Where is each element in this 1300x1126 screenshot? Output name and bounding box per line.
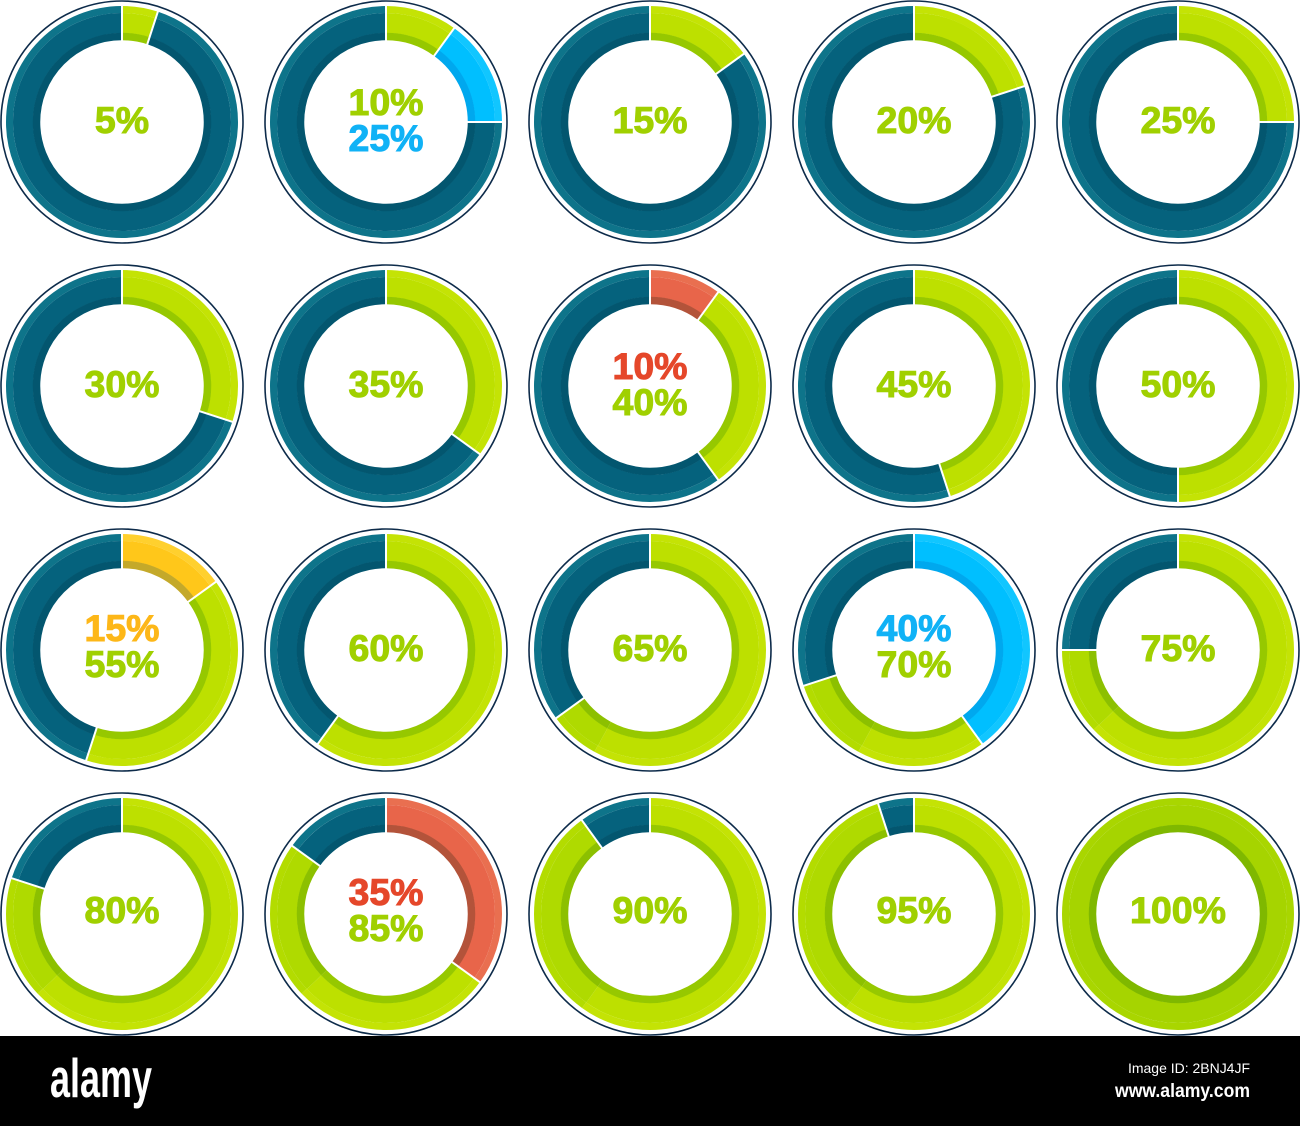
donut chart: 50%: 50% — [1140, 363, 1216, 405]
donut chart: 30% — [1, 265, 243, 507]
donut chart: 40% and 70% — [793, 529, 1035, 771]
donut chart: 100% — [1057, 793, 1299, 1035]
donut chart: 45% — [793, 265, 1035, 507]
donut chart: 20% — [793, 1, 1035, 243]
footer bar — [0, 1036, 1300, 1126]
donut chart: 65%: 65% — [612, 627, 688, 669]
donut chart: 25% — [1057, 1, 1299, 243]
donut chart: 60%: 60% — [348, 627, 424, 669]
donut chart: 5% — [1, 1, 243, 243]
image id: Image ID: 2BNJ4JF — [1128, 1060, 1250, 1076]
donut chart: 90%: 90% — [612, 889, 688, 931]
donut chart: 10% and 25%: 10% — [348, 81, 424, 123]
donut chart: 10% and 40%: 40% — [612, 381, 688, 423]
donut chart: 10% and 25%: 25% — [348, 117, 424, 159]
donut chart: 40% and 70%: 70% — [876, 643, 952, 685]
donut chart: 95% — [793, 793, 1035, 1035]
donut chart: 30%: 30% — [84, 363, 160, 405]
donut chart: 10% and 25% — [265, 1, 507, 243]
donut chart: 35% and 85%: 35% — [348, 871, 424, 913]
donut chart: 20%: 20% — [876, 99, 952, 141]
donut chart: 80% — [1, 793, 243, 1035]
donut chart: 75% — [1057, 529, 1299, 771]
website: www.alamy.com — [1114, 1081, 1250, 1102]
donut chart: 25%: 25% — [1140, 99, 1216, 141]
donut chart: 35%: 35% — [348, 363, 424, 405]
donut chart: 15% and 55%: 15% — [84, 607, 160, 649]
donut chart: 35% and 85%: 85% — [348, 907, 424, 949]
donut chart: 50% — [1057, 265, 1299, 507]
donut chart: 5%: 5% — [95, 99, 149, 141]
donut chart: 100%: 100% — [1130, 889, 1226, 931]
donut chart: 35% — [265, 265, 507, 507]
donut chart: 15% — [529, 1, 771, 243]
donut chart: 15% and 55%: 55% — [84, 643, 160, 685]
logo wordmark: alamy — [50, 1047, 152, 1109]
donut chart: 40% and 70%: 40% — [876, 607, 952, 649]
donut chart: 10% and 40%: 10% — [612, 345, 688, 387]
donut chart: 35% and 85% — [265, 793, 507, 1035]
donut chart: 15%: 15% — [612, 99, 688, 141]
donut chart: 10% and 40% — [529, 265, 771, 507]
donut chart: 45%: 45% — [876, 363, 952, 405]
donut chart: 95%: 95% — [876, 889, 952, 931]
donut chart: 65% — [529, 529, 771, 771]
donut chart: 60% — [265, 529, 507, 771]
donut chart: 80%: 80% — [84, 889, 160, 931]
donut chart: 75%: 75% — [1140, 627, 1216, 669]
donut chart: 90% — [529, 793, 771, 1035]
donut chart: 15% and 55% — [1, 529, 243, 771]
